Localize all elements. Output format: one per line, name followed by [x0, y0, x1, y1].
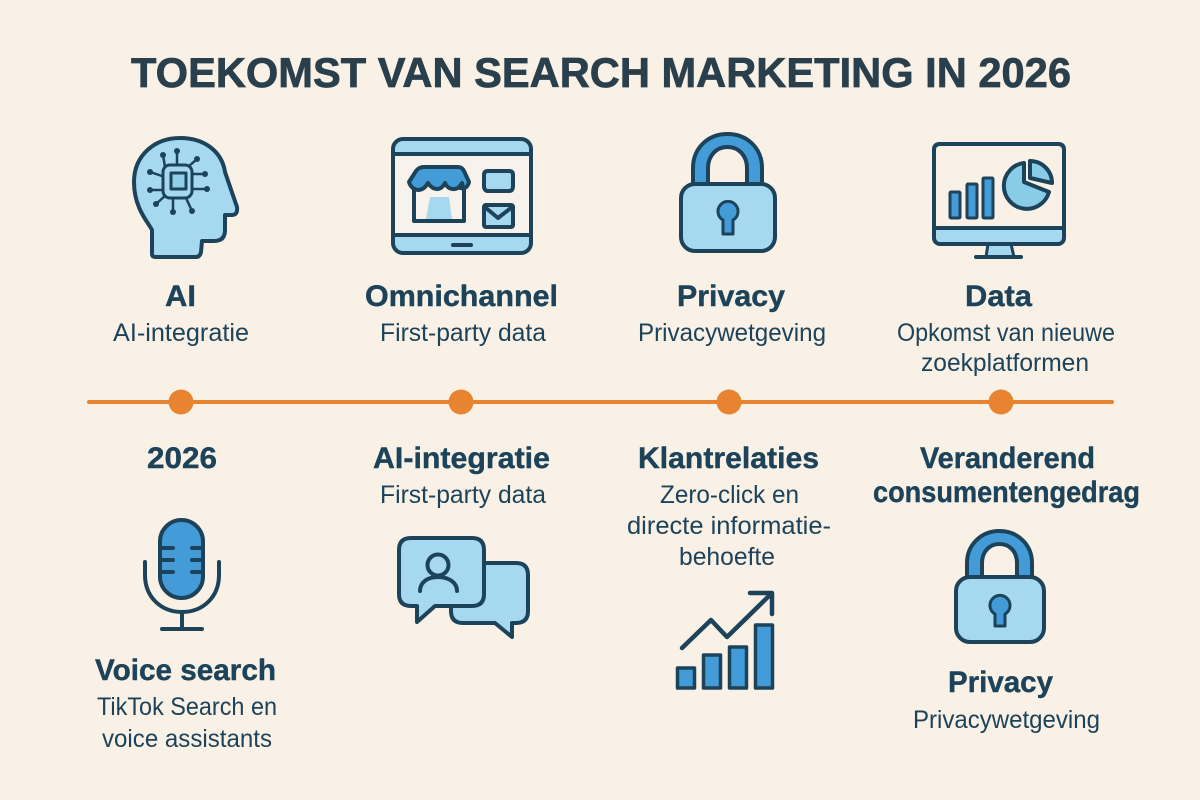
- icon: growth chart with arrow: [678, 593, 772, 688]
- heading: AI: AI: [165, 280, 196, 313]
- icon: microphone: [145, 520, 219, 629]
- heading: Omnichannel: Omnichannel: [365, 280, 558, 313]
- heading: Klantrelaties: Klantrelaties: [638, 442, 819, 475]
- heading: AI-integratie: AI-integratie: [373, 442, 550, 475]
- text: First-party data: First-party data: [380, 319, 546, 347]
- text: Zero-click en directe informatiebehoefte: [627, 481, 831, 571]
- top column labels: [113, 280, 1115, 377]
- heading: 2026: 2026: [147, 442, 217, 475]
- text: Opkomst van nieuwe zoekplatformen: [897, 319, 1115, 377]
- icon: AI head with chip: [134, 138, 237, 257]
- block: Voice search: Voice search: [95, 654, 276, 687]
- block: Privacy lower: Privacy: [948, 666, 1053, 699]
- text: Zero-click en directe informatiebehoefte: directe informatie-: [627, 512, 831, 540]
- text: Opkomst van nieuwe zoekplatformen: Opkomst van nieuwe: [897, 319, 1115, 347]
- text: AI-integratie: AI-integratie: [113, 319, 249, 347]
- lower column labels: [147, 442, 1140, 571]
- block: Voice search: voice assistants: [102, 725, 272, 753]
- text: First-party data: First-party data: [380, 481, 546, 509]
- title: TOEKOMST VAN SEARCH MARKETING IN 2026: [131, 49, 1071, 96]
- text: Zero-click en directe informatiebehoefte: Zero-click en: [660, 481, 799, 509]
- icon: monitor with charts: [934, 144, 1064, 257]
- text: Opkomst van nieuwe zoekplatformen: zoekplatformen: [921, 349, 1089, 377]
- timeline: [89, 390, 1112, 414]
- icon: padlock: [681, 134, 775, 251]
- icon: chat bubbles with person: [399, 538, 528, 637]
- block: Privacy lower: Privacywetgeving: [913, 706, 1100, 734]
- heading: Data: Data: [965, 280, 1032, 313]
- heading: Veranderend consumentengedrag: [873, 442, 1140, 509]
- text: Zero-click en directe informatiebehoefte: behoefte: [679, 543, 775, 571]
- icon: padlock lower: [956, 531, 1044, 642]
- heading: Privacy: Privacy: [677, 280, 785, 313]
- heading: Veranderend consumentengedrag: consumentengedrag: [873, 476, 1140, 509]
- block: Privacy lower: [913, 666, 1100, 734]
- block: Voice search: TikTok Search en: [97, 693, 277, 721]
- text: Privacywetgeving: Privacywetgeving: [638, 319, 826, 347]
- heading: Veranderend consumentengedrag: Veranderend: [920, 442, 1095, 475]
- block: Voice search: [95, 654, 277, 753]
- icon: online store on tablet: [393, 139, 531, 253]
